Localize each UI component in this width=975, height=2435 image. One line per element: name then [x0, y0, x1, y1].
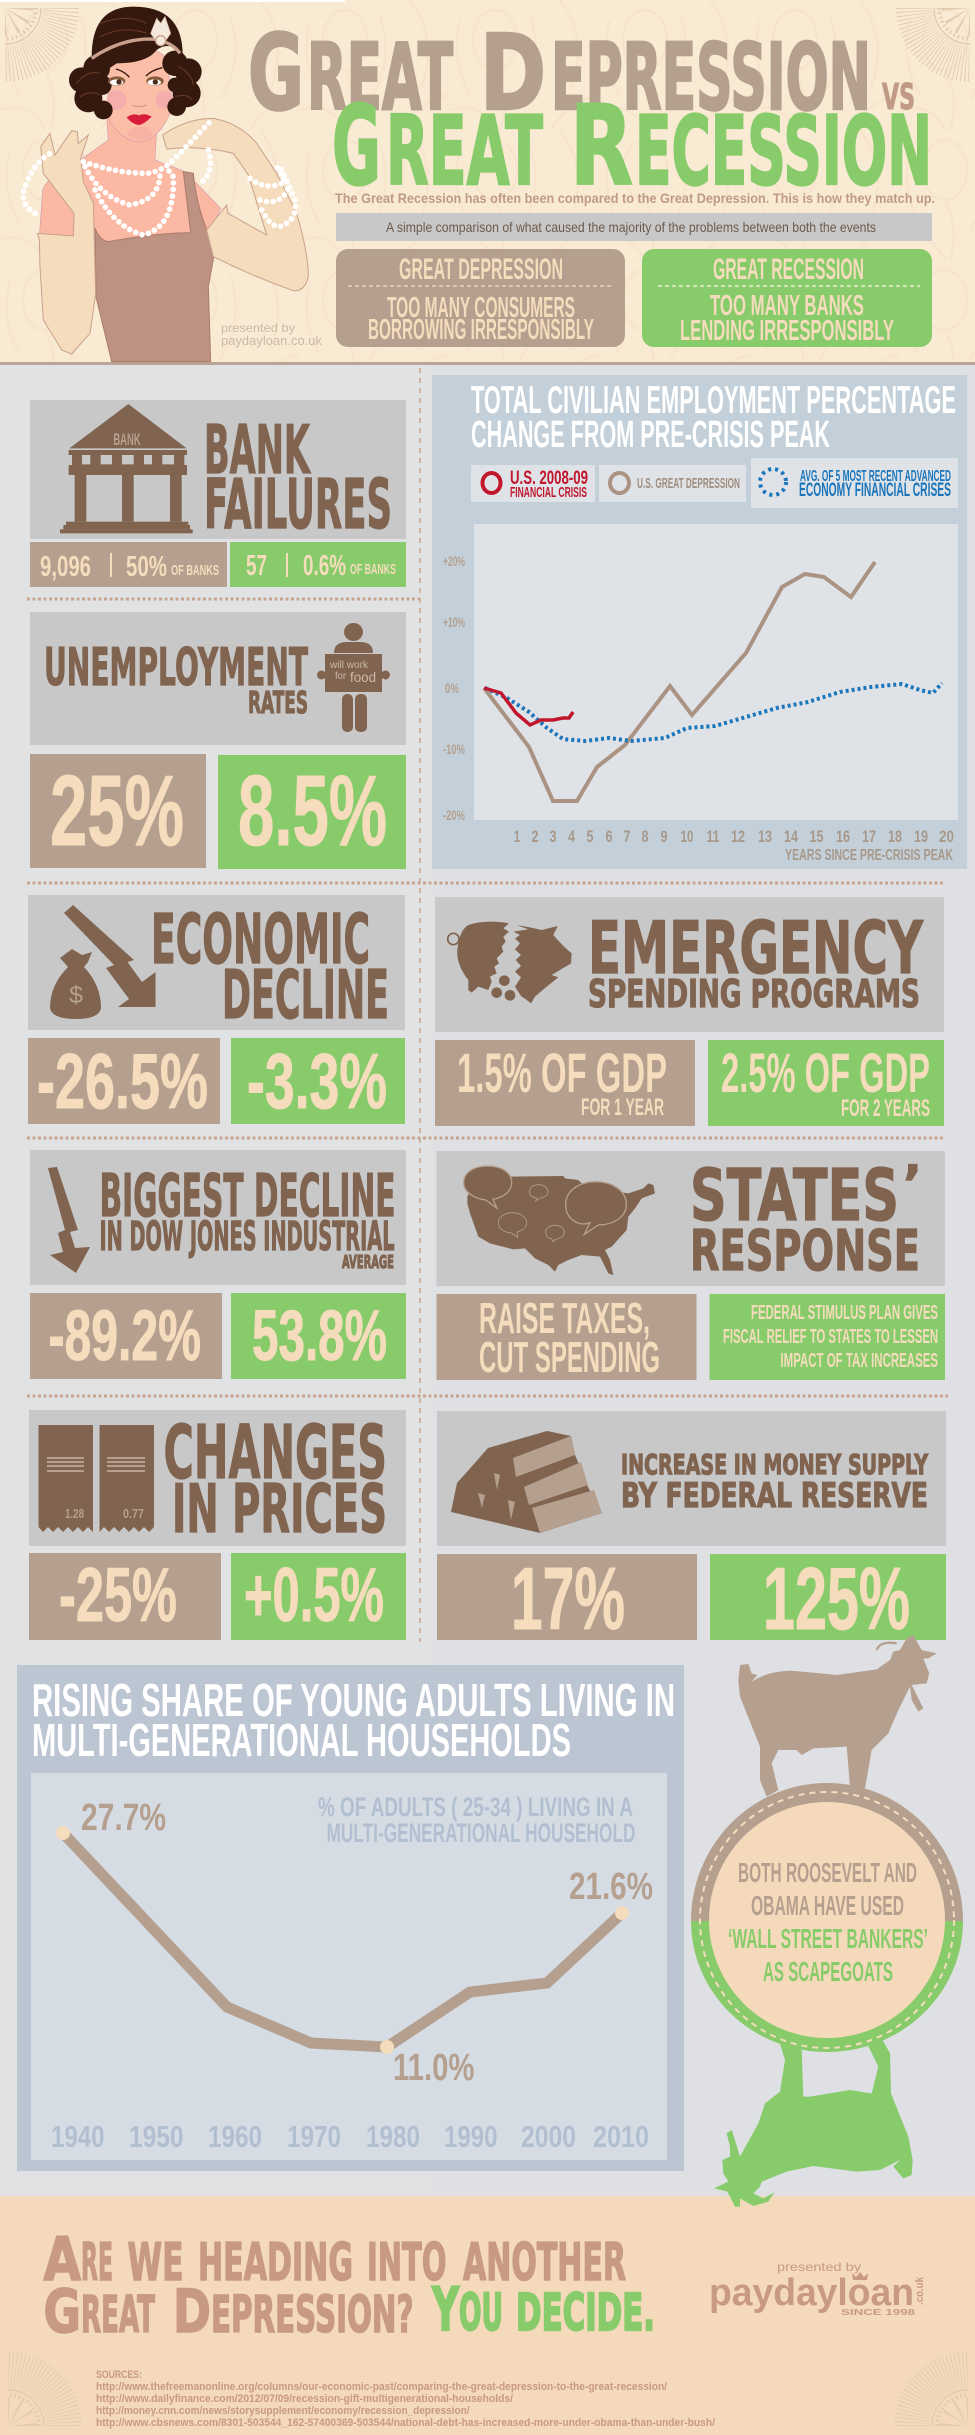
stat: recession Dow decline [231, 1293, 406, 1379]
stat: depression bank failures: 50% [126, 551, 167, 583]
icon: broken piggy bank [448, 922, 572, 1003]
ornament: top left sunburst [0, 0, 61, 64]
chart: x axis labels: 5 [586, 827, 594, 846]
chart: y axis labels: 0% [445, 680, 459, 696]
data labels [81, 1797, 653, 2089]
stat: recession bank failures: 57 [246, 550, 267, 582]
stat: recession price change [231, 1553, 406, 1640]
stat: depression emergency spending [435, 1040, 695, 1126]
stat: depression emergency spending: 1.5% OF GDP [457, 1041, 667, 1104]
ornament: bottom left sunburst [0, 2370, 64, 2435]
stat: depression economic decline: -26.5% [37, 1037, 208, 1125]
closing headline: D [173, 2277, 211, 2347]
legend: US 2008-09 [471, 465, 595, 502]
stat: recession bank failures: 0.6% [303, 550, 346, 582]
chart: y axis labels: +10% [443, 614, 465, 630]
heading: unemployment rates: RATES [248, 686, 308, 721]
stat: recession economic decline: -3.3% [247, 1037, 387, 1125]
stat: recession states' response [710, 1294, 945, 1380]
x axis years: 2010 [593, 2119, 649, 2154]
left column background tint [0, 365, 433, 2196]
stat: depression bank failures [30, 542, 227, 587]
header panel [0, 0, 975, 365]
sources: http://money.cnn.com/news/storysupplement/economy/recession_depression/ [96, 2405, 470, 2417]
badge text [728, 1857, 928, 1987]
title: Great Depression vs Great Recession: VS [882, 77, 915, 118]
stat: recession unemployment [218, 755, 406, 869]
heading: economic decline [151, 900, 389, 1034]
x axis years: 1960 [208, 2119, 262, 2154]
chart: x axis labels: 18 [888, 827, 902, 846]
stat: depression price change: -25% [59, 1553, 177, 1638]
text: presented by small credit [221, 321, 322, 348]
stat: recession bank failures: OF BANKS [350, 561, 396, 578]
heading: bank failures: FAILURES [204, 465, 392, 545]
illustration: flapper woman with pearls [23, 7, 308, 362]
chart: y axis labels [443, 553, 465, 823]
closing headline: OU [459, 2284, 503, 2343]
icon: brown goat [738, 1635, 937, 1797]
cause box: Great Recession: TOO MANY BANKS [710, 290, 864, 322]
panel: changes in prices [29, 1410, 406, 1548]
chart: x axis labels: 20 [939, 827, 954, 846]
logo: paydayloan: presented by [777, 2260, 861, 2274]
icon: bank building: BANK [113, 430, 141, 449]
icon: bank building [60, 404, 193, 533]
logo: paydayloan: .co.uk [914, 2276, 926, 2305]
icon: money bag [50, 949, 101, 1019]
panel: employment chart [432, 375, 967, 869]
stat: depression states' response: RAISE TAXES, [479, 1294, 650, 1343]
heading: bank failures [204, 411, 392, 545]
text: presented by small credit: presented by [221, 321, 295, 335]
title: Great Depression vs Great Recession: G [332, 82, 381, 210]
chart: plot area and lines [474, 524, 958, 820]
icon: man with sign: for [335, 671, 347, 682]
chart: x axis labels [514, 827, 954, 846]
icon: man with sign: food [350, 669, 376, 685]
panel: emergency spending programs [435, 897, 944, 1032]
title: Great Depression vs Great Recession: REAT [307, 24, 453, 131]
chart: x axis labels: 7 [624, 827, 630, 846]
data labels: 21.6% [569, 1866, 653, 1908]
icon: price receipts: 1.28 [65, 1506, 84, 1521]
title: Great Depression vs Great Recession: REAT [386, 97, 543, 207]
chart: y axis labels: -20% [443, 807, 465, 823]
panel: multi-generational households chart [17, 1665, 684, 2171]
panel: biggest decline in Dow Jones: IN DOW JONES INDUSTRIAL [100, 1214, 394, 1260]
closing headline: INTO [367, 2233, 446, 2293]
chart: y axis labels: -10% [443, 741, 465, 757]
heading: bank failures: BANK [204, 411, 311, 489]
chart: y axis labels: +20% [443, 553, 465, 569]
legend: US Great Depression [599, 465, 746, 502]
heading: states' response [690, 1154, 922, 1284]
heading: employment chart [471, 379, 956, 456]
chart: x axis labels: 15 [810, 827, 824, 846]
heading: unemployment rates [44, 638, 308, 721]
panel: states' response [436, 1151, 945, 1286]
x axis years [51, 2119, 649, 2154]
icon: USA map with speech bubbles [464, 1166, 655, 1275]
sources: http://www.dailyfinance.com/2012/07/09/recession-gift-multigenerational-households/ [96, 2393, 513, 2405]
closing headline: A [44, 2225, 81, 2295]
sources: http://www.cbsnews.com/8301-503544_162-57400369-503544/national-debt-has-increased-more-under-obama-than-under-bush/ [96, 2417, 715, 2429]
closing headline: G [44, 2277, 81, 2347]
closing headline: WE [128, 2233, 184, 2293]
heading: money supply [621, 1450, 929, 1516]
closing headline: DECIDE. [516, 2284, 655, 2343]
stat: recession Dow decline: 53.8% [252, 1297, 387, 1376]
closing headline [44, 2225, 655, 2347]
cause box: Great Recession [642, 249, 932, 347]
stat: depression Dow decline: -89.2% [48, 1297, 201, 1376]
data labels: 27.7% [81, 1797, 166, 1839]
closing headline: Y [431, 2275, 460, 2345]
chart: x axis labels: 17 [862, 827, 876, 846]
panel: bank failures [30, 400, 406, 545]
chart: x axis labels: 8 [642, 827, 648, 846]
chart: x axis labels: 19 [914, 827, 928, 846]
heading: economic decline: ECONOMIC [151, 900, 370, 980]
sources [96, 2369, 715, 2429]
chart label [318, 1792, 636, 1848]
x axis years: 1950 [129, 2119, 184, 2154]
stat: depression states' response [436, 1294, 696, 1382]
heading: biggest decline: AVERAGE [342, 1252, 394, 1273]
closing headline: EPRESSION? [211, 2286, 414, 2345]
panel: biggest decline in Dow Jones [30, 1150, 406, 1285]
heading: young adults [32, 1674, 675, 1766]
line chart [56, 1826, 629, 2054]
chart: x axis labels: 14 [784, 827, 798, 846]
logo: paydayloan: SINCE 1998 [841, 2308, 916, 2317]
stat: recession money supply [710, 1549, 946, 1648]
ornament: top right sunburst [914, 0, 975, 64]
heading: biggest decline: BIGGEST DECLINE [100, 1161, 396, 1230]
stat: depression emergency spending: FOR 1 YEAR [581, 1094, 664, 1121]
stat: recession price change: +0.5% [244, 1553, 384, 1638]
chart label: % OF ADULTS ( 25-34 ) LIVING IN A [318, 1792, 633, 1822]
heading: changes in prices: IN PRICES [172, 1470, 387, 1548]
icon: price receipts: 0.77 [123, 1506, 144, 1521]
legend: advanced economy crises [751, 458, 958, 508]
legend: US 2008-09: FINANCIAL CRISIS [510, 485, 587, 501]
stat: recession emergency spending [708, 1040, 944, 1126]
chart: x axis labels: 6 [606, 827, 612, 846]
ornament: bottom right sunburst [912, 2370, 975, 2435]
chart: x axis labels: 9 [660, 827, 668, 846]
heading: economic decline: DECLINE [222, 956, 389, 1034]
cause box: Great Depression: GREAT DEPRESSION [399, 253, 563, 286]
logo: paydayloan: paydayloan [709, 2272, 914, 2314]
title: Great Depression vs Great Recession: G [248, 12, 304, 134]
icon: green inverted goat [714, 2040, 913, 2207]
closing headline: REAT [81, 2286, 155, 2345]
stat: depression unemployment: 25% [50, 755, 184, 867]
heading: young adults: MULTI-GENERATIONAL HOUSEHOLDS [32, 1714, 571, 1766]
stat: depression bank failures: OF BANKS [171, 562, 219, 579]
x axis years: 1940 [51, 2119, 104, 2154]
comparison banner [336, 213, 932, 241]
icon: gold bars [451, 1431, 602, 1533]
chart label: MULTI-GENERATIONAL HOUSEHOLD [326, 1818, 636, 1848]
chart: x axis labels: 4 [568, 827, 575, 846]
heading: changes in prices: CHANGES [164, 1410, 387, 1496]
cause box: Great Depression [336, 249, 625, 347]
stat: depression Dow decline [30, 1293, 222, 1379]
heading: changes in prices [164, 1410, 387, 1548]
chart: x axis labels: 2 [532, 827, 538, 846]
data labels: 11.0% [393, 2047, 474, 2089]
text: presented by small credit: paydayloan.co.uk [221, 333, 322, 348]
chart: x axis labels: 16 [836, 827, 850, 846]
x axis years: 1980 [366, 2119, 420, 2154]
chart: x axis labels: 13 [758, 827, 772, 846]
badge: scapegoats circle [691, 1783, 963, 2052]
chart: x axis labels: 1 [514, 827, 520, 846]
x axis years: 2000 [521, 2119, 576, 2154]
closing headline: RE [81, 2233, 113, 2293]
icon: man with sign: will work [329, 660, 369, 671]
x axis years: 1970 [287, 2119, 341, 2154]
stat: recession unemployment: 8.5% [238, 755, 387, 867]
stat: depression unemployment [30, 754, 206, 868]
cause box: Great Depression: TOO MANY CONSUMERS [387, 292, 575, 324]
comparison banner: A simple comparison of what caused the majority of the problems between both the events [386, 219, 876, 235]
title: Great Depression vs Great Recession [248, 12, 932, 210]
icon: money bag: $ [69, 982, 83, 1009]
icon: man with sign [317, 623, 390, 732]
heading: unemployment rates: UNEMPLOYMENT [44, 638, 308, 698]
stat: recession bank failures [230, 542, 406, 587]
closing headline: HEADING [198, 2233, 353, 2293]
x axis years: 1990 [444, 2119, 498, 2154]
chart: x axis labels: 11 [706, 827, 720, 846]
panel: increase in money supply [437, 1411, 946, 1546]
cause box: Great Depression: BORROWING IRRESPONSIBLY [368, 314, 594, 346]
heading: biggest decline [100, 1161, 396, 1273]
closing headline: ANOTHER [463, 2233, 626, 2293]
legend: US 2008-09: U.S. 2008-09 [510, 468, 588, 489]
title: Great Depression vs Great Recession: D [480, 12, 546, 134]
heading: states' response: ’ [903, 1155, 922, 1213]
sources: http://www.thefreemanonline.org/columns/our-economic-past/comparing-the-great-depression-to-the-great-recession/ [96, 2381, 667, 2393]
title: Great Depression vs Great Recession: R [570, 82, 633, 210]
panel: economic decline [28, 895, 405, 1034]
icon: falling arrow [64, 905, 156, 1007]
legend: US Great Depression: U.S. GREAT DEPRESSION [637, 476, 740, 492]
heading: emergency spending programs [588, 906, 924, 1016]
stat: depression states' response: CUT SPENDING [479, 1333, 660, 1382]
icon: down arrow [48, 1167, 90, 1273]
stat: depression bank failures: 9,096 [40, 551, 91, 583]
heading: states' response: STATES [690, 1154, 899, 1237]
chart: x axis labels: 12 [731, 827, 745, 846]
icon: price receipts [38, 1425, 154, 1532]
footer band [0, 2196, 975, 2435]
panel: unemployment rates [30, 612, 406, 745]
stat: depression money supply: 17% [511, 1549, 625, 1648]
sources: SOURCES: [96, 2369, 142, 2381]
stat: depression money supply [437, 1549, 697, 1648]
chart: x axis labels: 3 [550, 827, 556, 846]
chart: x axis labels: 10 [680, 827, 694, 846]
